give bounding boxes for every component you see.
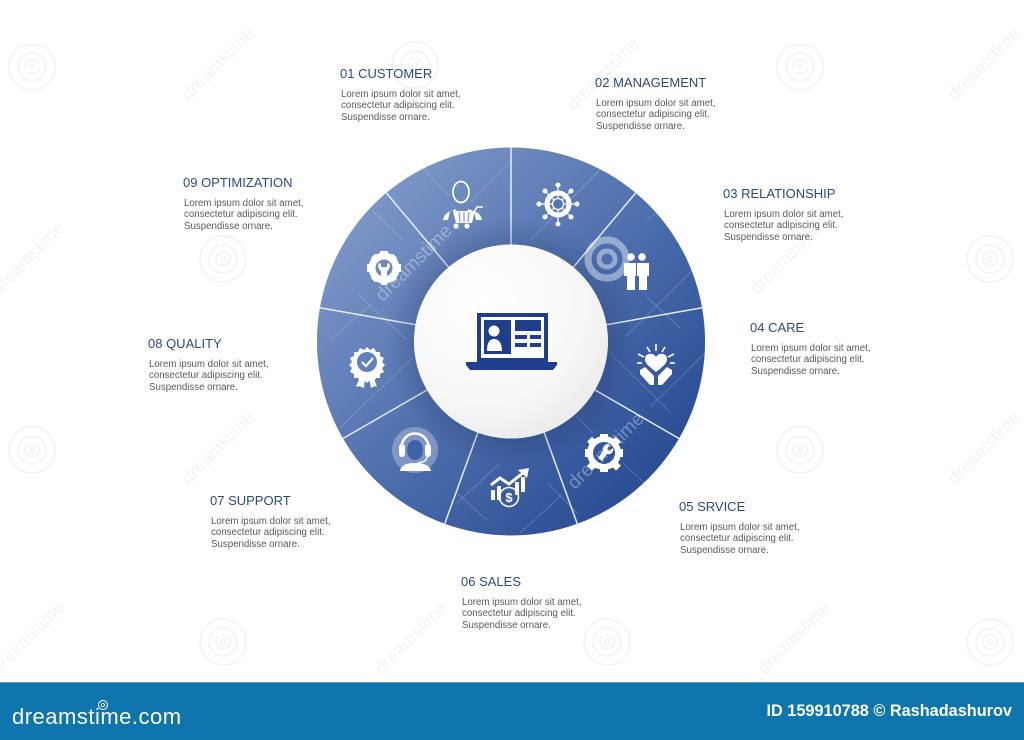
text: 08 quality: Suspendisse ornare. [149, 382, 238, 393]
text: 08 quality: 08 QUALITY [148, 336, 222, 351]
center circle [414, 244, 608, 438]
text: 02 management: Lorem ipsum dolor sit amet, [596, 98, 716, 108]
text: 02 management [595, 75, 716, 132]
text: 04 care: 04 CARE [750, 320, 804, 335]
text: 03 relationship: 03 RELATIONSHIP [723, 186, 835, 201]
text: 01 customer: consectetur adipiscing elit. [341, 100, 455, 111]
text: 02 management: Suspendisse ornare. [596, 121, 685, 132]
text: 08 quality [148, 336, 269, 393]
text: 03 relationship: Suspendisse ornare. [724, 232, 813, 243]
text: 03 relationship [723, 186, 844, 243]
watermark pattern: dreamstime [562, 33, 643, 114]
watermark pattern: dreamstime [177, 23, 258, 104]
icon: customer [443, 182, 483, 229]
icon: laptop [466, 313, 557, 370]
watermark text on donut [372, 221, 649, 494]
watermark text on donut: dreamstime [564, 409, 649, 494]
text: 03 relationship: Lorem ipsum dolor sit amet, [724, 208, 844, 220]
icon: optimization [367, 251, 401, 285]
icon: relationship [624, 253, 649, 290]
text: 05 service: Suspendisse ornare. [680, 545, 769, 556]
text: 06 sales: consectetur adipiscing elit. [462, 608, 576, 619]
watermark pattern: dreamstime [370, 597, 451, 678]
watermark pattern: dreamstime [177, 407, 258, 488]
text: 05 service: consectetur adipiscing elit. [680, 533, 794, 544]
text: 01 customer [340, 66, 461, 123]
text: 09 optimization [183, 175, 304, 232]
watermark text on donut: dreamstime [372, 221, 457, 306]
segments [317, 148, 705, 535]
text: 09 optimization: 09 OPTIMIZATION [183, 175, 293, 190]
text: 02 management: consectetur adipiscing elit. [596, 109, 710, 120]
text: 08 quality: consectetur adipiscing elit. [149, 370, 263, 381]
text: 07 support: Suspendisse ornare. [211, 539, 300, 550]
text: 04 care [750, 320, 871, 377]
text: 09 optimization: consectetur adipiscing elit. [184, 209, 298, 220]
text: 07 support: 07 SUPPORT [210, 493, 291, 508]
text: 06 sales: Suspendisse ornare. [462, 620, 551, 631]
text: 07 support: consectetur adipiscing elit. [211, 527, 325, 538]
text: 02 management: 02 MANAGEMENT [595, 75, 706, 90]
text: 06 sales: 06 SALES [461, 574, 521, 589]
text: 06 sales [461, 574, 582, 631]
footer credit: ID 159910788 © Rashadashurov [766, 702, 1012, 720]
footer logo spiral [98, 700, 108, 710]
text: 05 service: 05 SRVICE [679, 499, 745, 514]
footer logo: dreamstime.com [12, 704, 182, 729]
icon: sales: $ [505, 490, 513, 505]
watermark pattern: dreamstime [943, 23, 1024, 104]
text: 04 care: consectetur adipiscing elit. [751, 354, 865, 365]
text: 05 service [679, 499, 800, 556]
icon: support [399, 434, 431, 471]
text: 09 optimization: Suspendisse ornare. [184, 221, 273, 232]
text: 04 care: Lorem ipsum dolor sit amet, [751, 342, 871, 354]
text: 03 relationship: consectetur adipiscing elit. [724, 220, 838, 231]
watermark pattern: dreamstime [753, 597, 834, 678]
text: 05 service: Lorem ipsum dolor sit amet, [680, 522, 800, 532]
text: 08 quality: Lorem ipsum dolor sit amet, [149, 358, 269, 370]
text: 01 customer: Suspendisse ornare. [341, 112, 430, 123]
footer bar [0, 682, 1024, 740]
text: 01 customer: Lorem ipsum dolor sit amet, [341, 88, 461, 100]
icon: management [537, 183, 579, 226]
watermark spiral [588, 240, 626, 278]
text: 07 support: Lorem ipsum dolor sit amet, [211, 516, 331, 526]
icon: quality [349, 347, 385, 388]
text: 09 optimization: Lorem ipsum dolor sit amet, [184, 198, 304, 208]
watermark pattern: dreamstime [745, 217, 826, 298]
text: 07 support [210, 493, 331, 550]
text: 04 care: Suspendisse ornare. [751, 366, 840, 377]
icon: care [637, 344, 675, 385]
icon: service [585, 434, 623, 472]
watermark spiral [392, 427, 438, 473]
icon: sales [491, 468, 529, 506]
text: 01 customer: 01 CUSTOMER [340, 66, 432, 81]
text: 06 sales: Lorem ipsum dolor sit amet, [462, 596, 582, 608]
watermark pattern: dreamstime [943, 407, 1024, 488]
